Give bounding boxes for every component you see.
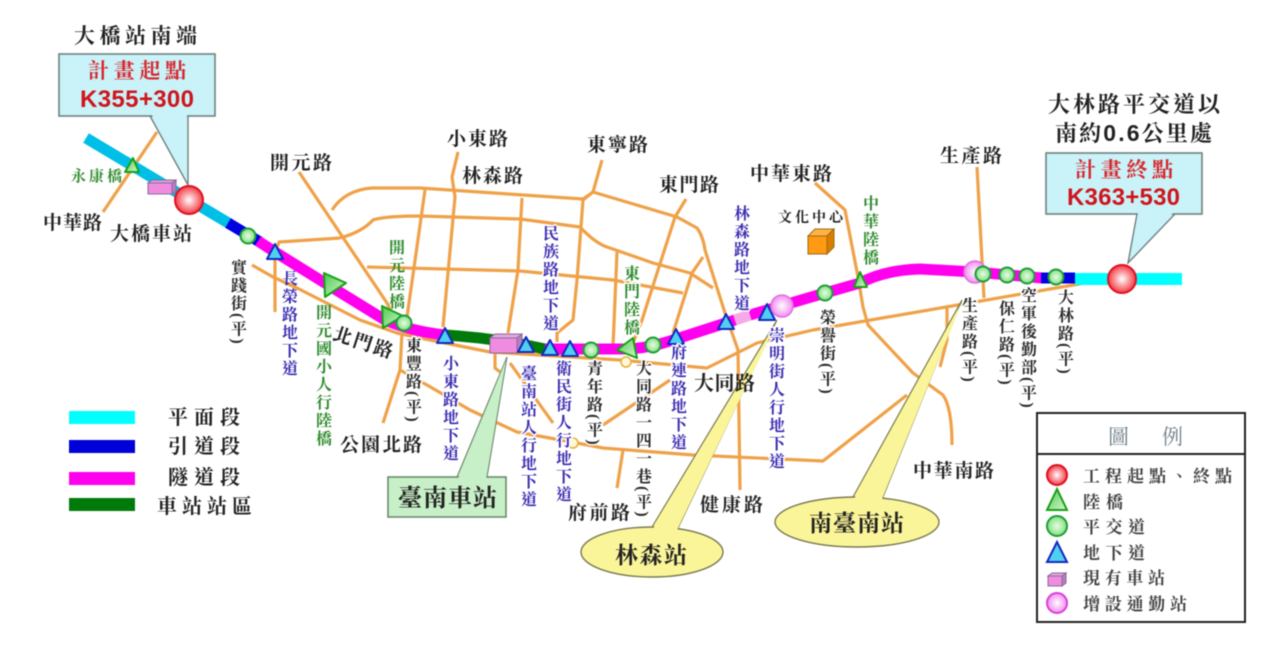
callout: project start: K355+300 [80,86,194,113]
horizontal road labels: 生產路 [940,144,1002,167]
horizontal road labels: 大橋站南端 [74,24,197,48]
line type legend [69,406,252,518]
vertical crossing labels: 實踐街(平) [228,258,246,346]
callout: Tainan station [388,357,507,517]
new commuter stations [771,261,986,317]
horizontal road labels: 東寧路 [587,133,648,156]
legend: existing station [1048,568,1165,588]
vertical crossing labels: 空軍後勤部(平) [1018,286,1036,410]
horizontal road labels [43,24,1222,524]
horizontal road labels: 開元路 [270,152,332,174]
road network [103,132,1085,490]
vertical crossing labels: 長榮路地下道 [280,270,298,378]
horizontal road labels: 南約0.6公里處 [1055,120,1212,146]
horizontal road labels: 小東路 [447,127,508,150]
callout: project end [1046,153,1202,263]
legend: underpass [1047,542,1145,563]
surface section: 平面段 [168,406,240,429]
horizontal road labels: 大林路平交道以 [1048,92,1222,117]
icon: culture centre cube [808,229,834,254]
vertical crossing labels: 大同路一四一巷(平) [634,360,652,519]
vertical crossing labels: 衛民街人行地下道 [554,359,572,504]
symbol legend [1037,413,1245,622]
tunnel section: 隧道段 [168,466,240,489]
horizontal road labels: 大橋車站 [110,222,192,245]
vertical crossing labels: 保仁路(平) [996,300,1014,387]
vertical crossing labels: 開元國小人行陸橋 [314,304,332,448]
icon: existing station Daqiao [148,180,176,194]
vertical crossing labels: 中華陸橋 [860,195,878,267]
underpass markers [267,244,775,356]
station area [69,494,252,518]
legend: new commuter station [1047,593,1187,614]
ramp section: 引道段 [168,435,240,458]
horizontal road labels: 健康路 [700,494,763,516]
vertical crossing labels: 榮譽街(平) [818,308,836,396]
callout: South Tainan station: 南臺南站 [809,511,904,536]
legend: level crossing: 平交道 [1083,517,1145,537]
horizontal road labels: 中華南路 [913,459,994,482]
vertical crossing labels: 民族路地下道 [540,225,558,333]
small junction circles [568,357,631,448]
legend: underpass: 地下道 [1083,543,1145,563]
horizontal road labels: 中華路 [43,212,102,234]
vertical crossing labels: 臺南站人行地下道 [518,364,536,509]
legend: existing station: 現有車站 [1083,568,1165,588]
callout: project start [59,54,215,185]
horizontal road labels: 公園北路 [340,433,422,456]
railway line segments [86,138,1182,349]
callout: project end: K363+530 [1067,184,1180,211]
station area: 車站站區 [157,494,252,518]
vertical crossing labels: 林森路地下道 [732,204,750,313]
vertical crossing labels: 生產路(平) [960,297,978,384]
legend: overpass [1047,489,1123,512]
overpass markers [125,158,867,358]
vertical crossing labels: 大林路(平) [1056,289,1074,376]
vertical crossing labels: 府連路地下道 [668,344,686,452]
callout: project end: 計畫終點 [1075,158,1173,182]
horizontal road labels: 林森路 [462,165,523,187]
vertical crossing labels: 東豐路(平) [404,337,422,424]
vertical crossing labels: 開元陸橋 [386,239,404,311]
horizontal road labels: 大同路 [694,372,755,395]
callout: South Tainan station [775,300,962,547]
vertical crossing labels: 崇明街人行地下道 [766,326,784,471]
surface section [69,406,240,429]
start and end markers [175,186,1136,293]
icon: existing station Tainan [490,334,522,353]
vertical crossing labels: 東門陸橋 [622,265,640,337]
vertical crossing labels: 小東路地下道 [440,355,458,463]
horizontal road labels: 永康橋 [71,167,122,185]
legend: level crossing [1047,516,1145,537]
callout: Linsen station: 林森站 [615,543,687,568]
horizontal road labels: 東門路 [659,173,719,196]
horizontal road labels: 文化中心 [778,209,845,226]
ramp section [69,435,240,458]
legend: new commuter station: 增設通勤站 [1083,594,1187,614]
horizontal road labels: 中華東路 [750,162,832,185]
legend title: 圖例 [1108,425,1183,449]
legend: overpass: 陸橋 [1083,492,1123,512]
legend: start and end point: 工程起點、終點 [1083,466,1232,486]
vertical crossing labels: 青年路(平) [584,359,602,447]
tunnel section [69,466,240,489]
vertical crossing labels [228,195,1074,519]
callout: project start: 計畫起點 [88,59,186,83]
horizontal road labels: 府前路 [568,502,630,524]
callout: Linsen station [581,320,777,577]
level crossing markers [240,228,1064,358]
callout: Tainan station: 臺南車站 [398,484,497,512]
horizontal road labels: 北門路 [330,323,396,363]
